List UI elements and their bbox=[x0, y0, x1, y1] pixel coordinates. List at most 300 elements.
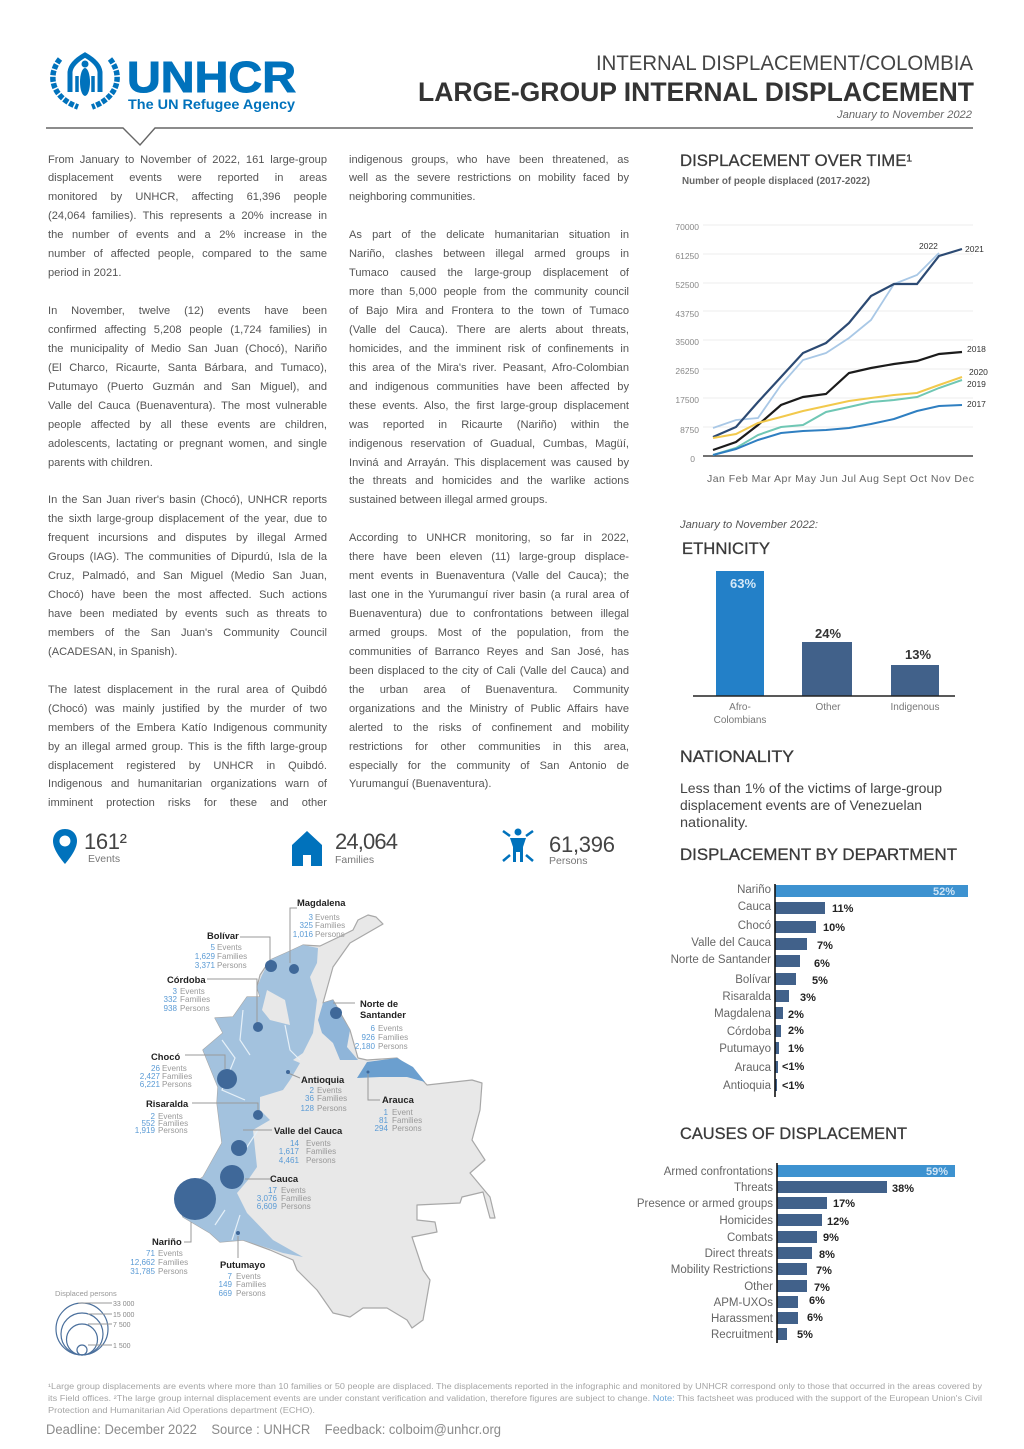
category labels: Antioquia bbox=[723, 1080, 772, 1092]
text column 2: Nariño, clashes between illegal armed groups in bbox=[349, 248, 629, 260]
label: Bolívar: Families bbox=[217, 952, 247, 961]
category labels: Homicides bbox=[719, 1215, 773, 1227]
label: Arauca: 294 bbox=[374, 1124, 388, 1133]
label: Norte de Santander: Norte de bbox=[360, 998, 398, 1009]
legend title: Displaced persons bbox=[55, 1289, 117, 1298]
text column 2: ment events in Buenaventura (Valle del Cauca); the bbox=[349, 570, 629, 582]
value labels: 52% bbox=[933, 886, 955, 898]
label: Magdalena: Events bbox=[315, 913, 340, 922]
label: Valle del Cauca: Persons bbox=[306, 1156, 336, 1165]
label: Cauca: 6,609 bbox=[257, 1202, 277, 1211]
text column 1: In the San Juan river's basin (Chocó), UNHCR reports bbox=[48, 494, 327, 506]
text column 2: this area of the Mira's river. Peasant, Afro-Colombian bbox=[349, 362, 629, 374]
label: Valle del Cauca: 14 bbox=[290, 1139, 299, 1148]
label: Risaralda: Events bbox=[158, 1112, 183, 1121]
text column 2: last one in the Yurumanguí river basin (a rural area of bbox=[349, 589, 629, 601]
text column 2: been displaced to the city of Cali (Valle del Cauca) and bbox=[349, 665, 629, 677]
category labels: Combats bbox=[727, 1232, 773, 1244]
chart heading: displacement over time bbox=[680, 151, 912, 187]
category labels: Presence or armed groups bbox=[637, 1198, 773, 1210]
label: Risaralda: 552 bbox=[141, 1119, 155, 1128]
category labels: Direct threats bbox=[705, 1248, 773, 1260]
label: Bolívar: Persons bbox=[217, 961, 247, 970]
text column 2: indigenous groups, who have been threatened, as bbox=[349, 154, 629, 166]
header rule with notch bbox=[46, 128, 973, 145]
kicker: INTERNAL DISPLACEMENT/COLOMBIA bbox=[596, 52, 973, 75]
text column 1: the number of events and a 2% increase in the bbox=[48, 229, 327, 241]
label: Antioquia bbox=[300, 1074, 347, 1113]
label: Cauca: 3,076 bbox=[257, 1194, 277, 1203]
category labels: Arauca bbox=[735, 1062, 772, 1074]
label: Arauca: Persons bbox=[392, 1124, 422, 1133]
label: Putumayo: Events bbox=[236, 1272, 261, 1281]
bar: Afro-Colombians bbox=[716, 571, 764, 696]
text column 1: frequent incursions and disputes by illegal Armed bbox=[48, 532, 327, 544]
department boundaries bbox=[215, 1010, 300, 1240]
text column 2: these events. Also, the first large-group displacement bbox=[349, 400, 629, 412]
label: Putumayo bbox=[218, 1259, 266, 1298]
category labels: Risaralda bbox=[722, 991, 772, 1003]
label: Chocó bbox=[140, 1051, 192, 1089]
causes heading: CAUSES OF DISPLACEMENT bbox=[680, 1124, 907, 1143]
label: Chocó: 6,221 bbox=[140, 1080, 160, 1089]
text column 1: displacement events were reported in areas bbox=[48, 172, 327, 184]
legend values: 7 500 bbox=[113, 1322, 131, 1329]
category labels: Magdalena bbox=[714, 1008, 772, 1020]
label: Putumayo: Families bbox=[236, 1280, 266, 1289]
text column 1: From January to November of 2022, 161 large-group bbox=[48, 154, 327, 166]
bar: Indigenous bbox=[891, 665, 939, 696]
footnotes: Protection and Humanitarian Aid Operations department (ECHO). bbox=[48, 1406, 315, 1415]
legend values: 33 000 bbox=[113, 1301, 135, 1308]
label: Chocó: 2,427 bbox=[140, 1072, 160, 1081]
text column 2: Tumaco caused the large-group displacement of bbox=[349, 267, 629, 279]
label: Putumayo: 149 bbox=[218, 1280, 232, 1289]
text column 2: restrictions for other communities in this area, bbox=[349, 741, 629, 753]
label: Antioquia: 128 bbox=[300, 1104, 314, 1113]
label: Bolívar: 3,371 bbox=[195, 961, 215, 970]
leader lines bbox=[184, 908, 380, 1258]
label: Valle del Cauca: Events bbox=[306, 1139, 331, 1148]
values: 13% bbox=[905, 647, 931, 662]
category labels: APM-UXOs bbox=[714, 1297, 773, 1309]
label: Chocó: Chocó bbox=[151, 1051, 180, 1062]
label: Antioquia: Families bbox=[317, 1094, 347, 1103]
text column 1: displacement registered by UNHCR in Quibdó. bbox=[48, 760, 327, 772]
label: Risaralda: Persons bbox=[158, 1126, 188, 1135]
categories bbox=[714, 702, 939, 726]
text column 1: members of the San Juan's Community Council bbox=[48, 627, 327, 639]
label: Norte de Santander: Santander bbox=[360, 1009, 406, 1020]
series labels: 2022 bbox=[919, 241, 938, 251]
text column 1: (24,064 families). This represents a 20% increase in bbox=[48, 210, 327, 222]
text column 2 bbox=[349, 154, 629, 790]
label: Chocó: 26 bbox=[151, 1064, 160, 1073]
persons value: 61,396 bbox=[549, 832, 615, 857]
label: Nariño: Families bbox=[158, 1258, 188, 1267]
text column 2: As part of the delicate humanitarian situation in bbox=[349, 229, 629, 241]
text column 1: imminent protection risks for these and other bbox=[48, 797, 327, 809]
text column 1: number of affected people, compared to the same bbox=[48, 248, 327, 260]
region: western affected departments bbox=[175, 945, 318, 1257]
text column 1: people affected by all these events are children, bbox=[48, 419, 327, 431]
text column 2: Buenaventura) due to confrontations between illegal bbox=[349, 608, 629, 620]
text column 2: sustained between illegal armed groups. bbox=[349, 494, 548, 506]
value labels: 3% bbox=[800, 992, 816, 1004]
label: Norte de Santander: 2,180 bbox=[355, 1042, 375, 1051]
label: Córdoba: 332 bbox=[163, 995, 177, 1004]
baseline bbox=[693, 695, 955, 697]
label: Córdoba: Families bbox=[180, 995, 210, 1004]
stat: persons bbox=[503, 828, 615, 867]
text column 1: (ACADESAN, in Spanish). bbox=[48, 646, 177, 658]
label: Cauca: 17 bbox=[268, 1186, 277, 1195]
label: Norte de Santander bbox=[355, 998, 408, 1051]
label: Córdoba bbox=[163, 974, 210, 1013]
series labels: 2019 bbox=[967, 379, 986, 389]
values: 24% bbox=[815, 626, 841, 641]
nationality text: displacement events are of Venezuelan bbox=[680, 797, 922, 813]
series labels: 2021 bbox=[965, 244, 984, 254]
category labels: Valle del Cauca bbox=[691, 937, 772, 949]
text column 1: monitored by UNHCR, affecting 61,396 people bbox=[48, 191, 327, 203]
categories: Afro- bbox=[729, 702, 751, 713]
text column 1: by an illegal armed group. This is the fifth large-group bbox=[48, 741, 327, 753]
text column 1: period in 2021. bbox=[48, 267, 121, 279]
y axis labels: 26250 bbox=[675, 366, 699, 376]
label: Risaralda: 2 bbox=[150, 1112, 155, 1121]
y axis labels: 70000 bbox=[675, 222, 699, 232]
stat: events bbox=[53, 829, 127, 865]
category labels: Mobility Restrictions bbox=[671, 1264, 773, 1276]
text column 2: the urban area of Buenaventura. Community bbox=[349, 684, 629, 696]
label: Antioquia: 36 bbox=[305, 1094, 314, 1103]
value labels: 6% bbox=[814, 958, 830, 970]
category labels: Cauca bbox=[738, 901, 772, 913]
label: Antioquia: Persons bbox=[317, 1104, 347, 1113]
label: Risaralda: Families bbox=[158, 1119, 188, 1128]
y axis labels: 17500 bbox=[675, 395, 699, 405]
value labels bbox=[782, 886, 955, 1092]
bars bbox=[777, 1165, 955, 1340]
text column 1: have been mediated by events such as threats to bbox=[48, 608, 327, 620]
label: Arauca: Event bbox=[392, 1108, 413, 1117]
events label: Events bbox=[88, 853, 120, 865]
bar chart: ethnicity bbox=[693, 571, 955, 726]
text column 2: homicides, and the imminent risk of confinements in bbox=[349, 343, 629, 355]
category labels: Recruitment bbox=[711, 1329, 774, 1341]
text column 1: Groups (IAG). The communities of Dipurdú, Isla de la bbox=[48, 551, 327, 563]
label: Arauca: 81 bbox=[379, 1116, 388, 1125]
families label: Families bbox=[335, 854, 374, 866]
label: Norte de Santander: Events bbox=[378, 1024, 403, 1033]
line: 2017 bbox=[713, 405, 962, 455]
stat: families bbox=[292, 829, 398, 866]
text column 2: Inviná and Arrayán. This displacement was caused by bbox=[349, 456, 629, 468]
bar chart: displacement by department bbox=[671, 884, 968, 1097]
text column 2: the threats and homicides and the warlike actions bbox=[349, 475, 629, 487]
families value: 24,064 bbox=[335, 829, 398, 854]
y axis labels: 0 bbox=[690, 454, 695, 464]
text column 1: Indigenous and humanitarian organizations warn of bbox=[48, 778, 327, 790]
footnotes: its Field offices. ²The large group internal displacement events are under constant verification and validation, therefore figures are subject to change. Note: This factsheet was produced with the support of the European Union's Civil bbox=[48, 1394, 982, 1403]
value labels: 10% bbox=[823, 922, 845, 934]
axis bbox=[776, 1163, 778, 1343]
y axis labels: 35000 bbox=[675, 337, 699, 347]
y axis labels: 8750 bbox=[680, 425, 699, 435]
text column 2: more than 5,000 people from the community council bbox=[349, 286, 629, 298]
line chart bbox=[675, 222, 988, 485]
value labels: 7% bbox=[814, 1282, 830, 1294]
category labels bbox=[671, 884, 772, 1092]
line: 2019 bbox=[713, 380, 962, 455]
label: Valle del Cauca: 1,617 bbox=[279, 1147, 299, 1156]
value labels: <1% bbox=[782, 1061, 805, 1073]
line: 2022 bbox=[713, 253, 939, 428]
label: Putumayo: 7 bbox=[227, 1272, 232, 1281]
label: Nariño: Events bbox=[158, 1249, 183, 1258]
map legend: displaced persons bbox=[55, 1289, 135, 1355]
text column 2: communities of Barranco Reyes and San José, has bbox=[349, 646, 629, 658]
label: Norte de Santander: 6 bbox=[370, 1024, 375, 1033]
text column 2: alerted to the risks of confinement and mobility bbox=[349, 722, 629, 734]
map of Colombia bbox=[130, 897, 495, 1328]
label: Risaralda bbox=[135, 1098, 189, 1135]
y axis labels: 52500 bbox=[675, 280, 699, 290]
category labels: Other bbox=[744, 1281, 773, 1293]
label: Norte de Santander: Families bbox=[378, 1033, 408, 1042]
value labels: 8% bbox=[819, 1249, 835, 1261]
category labels: Córdoba bbox=[727, 1026, 772, 1038]
value labels: 5% bbox=[797, 1329, 813, 1341]
events value: 161² bbox=[84, 829, 127, 854]
bars bbox=[775, 885, 968, 1091]
y axis labels bbox=[675, 222, 699, 464]
main title: LARGE-GROUP INTERNAL DISPLACEMENT bbox=[418, 77, 974, 107]
footnotes: ¹Large group displacements are events where more than 10 families or 50 people are displaced. The displacements reported in the infographic and monitored by UNHCR correspond only to those that occurred in the areas covered by bbox=[48, 1382, 982, 1391]
persons label: Persons bbox=[549, 855, 588, 867]
label: Antioquia: Antioquia bbox=[301, 1074, 345, 1085]
label: Córdoba: Córdoba bbox=[167, 974, 206, 985]
legend values bbox=[113, 1301, 135, 1350]
text column 2: of Bajo Mira and Frontera to the town of Tumaco bbox=[349, 305, 629, 317]
category labels: Chocó bbox=[738, 920, 771, 932]
value labels: 5% bbox=[812, 975, 828, 987]
text column 1: parents with children. bbox=[48, 456, 153, 468]
ethnicity heading: ETHNICITY bbox=[682, 539, 770, 558]
label: Antioquia: 2 bbox=[309, 1086, 314, 1095]
legend circles bbox=[56, 1303, 108, 1355]
date range: January to November 2022 bbox=[836, 109, 972, 121]
label: Cauca: Cauca bbox=[270, 1173, 299, 1184]
value labels: 6% bbox=[807, 1312, 823, 1324]
sub-heading: Number of people displaced (2017-2022) bbox=[682, 176, 870, 187]
month labels: Jan Feb Mar Apr May Jun Jul Aug Sept Oct Nov Dec bbox=[707, 473, 974, 485]
label: Córdoba: 3 bbox=[172, 987, 177, 996]
label: Nariño bbox=[130, 1236, 188, 1276]
period note: January to November 2022: bbox=[679, 519, 818, 531]
gridlines bbox=[703, 225, 973, 427]
label: Arauca: Families bbox=[392, 1116, 422, 1125]
text column 2: and indigenous communities have been affected by bbox=[349, 381, 629, 393]
legend leaders bbox=[78, 1303, 112, 1345]
label: Arauca bbox=[374, 1094, 422, 1133]
label: Nariño: 31,785 bbox=[130, 1267, 155, 1276]
text column 1: In November, twelve (12) events have been bbox=[48, 305, 327, 317]
nationality text: nationality. bbox=[680, 814, 748, 830]
value labels bbox=[797, 1166, 948, 1341]
label: Chocó: Persons bbox=[162, 1080, 192, 1089]
value labels: 38% bbox=[892, 1183, 914, 1195]
value labels: 6% bbox=[809, 1295, 825, 1307]
label: Valle del Cauca: 4,461 bbox=[279, 1156, 299, 1165]
y axis labels: 43750 bbox=[675, 309, 699, 319]
text column 2: (Valle del Cauca). There are alerts about threats, bbox=[349, 324, 629, 336]
category labels: Putumayo bbox=[719, 1043, 771, 1055]
category labels: Norte de Santander bbox=[671, 954, 771, 966]
series labels: 2018 bbox=[967, 344, 986, 354]
text column 2: According to UNHCR monitoring, so far in 2022, bbox=[349, 532, 629, 544]
line: 2020 bbox=[713, 377, 962, 438]
label: Córdoba: Persons bbox=[180, 1004, 210, 1013]
value labels: 12% bbox=[827, 1216, 849, 1228]
legend values: 15 000 bbox=[113, 1312, 135, 1319]
label: Putumayo: Persons bbox=[236, 1289, 266, 1298]
nationality heading: NATIONALITY bbox=[680, 747, 794, 766]
label: Cauca: Persons bbox=[281, 1202, 311, 1211]
label: Valle del Cauca: Families bbox=[306, 1147, 336, 1156]
country outline bbox=[175, 915, 495, 1328]
text column 1: Putumayo (Puerto Guzmán and San Miguel), and bbox=[48, 381, 327, 393]
value labels: 11% bbox=[832, 903, 854, 915]
bar: Other bbox=[802, 642, 852, 696]
label: Valle del Cauca: Valle del Cauca bbox=[274, 1125, 343, 1136]
region: Norte de Santander bbox=[318, 1000, 358, 1060]
region: Arauca bbox=[357, 1058, 425, 1082]
value labels: 17% bbox=[833, 1198, 855, 1210]
value labels: 2% bbox=[788, 1009, 804, 1021]
value labels: 59% bbox=[926, 1166, 948, 1178]
text column 2: indigenous reservation of Guadual, Cumbas, Magüí, bbox=[349, 438, 629, 450]
value labels: 9% bbox=[823, 1232, 839, 1244]
label: Norte de Santander: Persons bbox=[378, 1042, 408, 1051]
category labels: Nariño bbox=[737, 884, 771, 896]
label: Córdoba: 938 bbox=[163, 1004, 177, 1013]
text column 1: Valle del Cauca (Buenaventura). The most vulnerable bbox=[48, 400, 327, 412]
text column 2: was reported in Ricaurte (Nariño) within the bbox=[349, 419, 629, 431]
categories: Other bbox=[815, 702, 841, 713]
icon: person with rays bbox=[503, 828, 533, 862]
text column 1: The latest displacement in the rural area of Quibdó bbox=[48, 684, 327, 696]
values: 63% bbox=[730, 576, 756, 591]
UNHCR logo bbox=[53, 53, 296, 112]
category labels: Bolívar bbox=[735, 974, 771, 986]
label: Nariño: Persons bbox=[158, 1267, 188, 1276]
label: Nariño: 12,662 bbox=[130, 1258, 155, 1267]
label: Nariño: Nariño bbox=[152, 1236, 182, 1247]
label: Bolívar: Events bbox=[217, 943, 242, 952]
text column 1: members of the Embera Katío Indigenous community bbox=[48, 722, 327, 734]
series labels: 2017 bbox=[967, 399, 986, 409]
categories: Colombians bbox=[714, 715, 766, 726]
text column 1: (El Charco, Ricaurte, Santa Bárbara, and Tumaco), bbox=[48, 362, 327, 374]
text column 2: neighboring communities. bbox=[349, 191, 475, 203]
label: Cauca: Events bbox=[281, 1186, 306, 1195]
series labels: 2020 bbox=[969, 367, 988, 377]
label: Nariño: 71 bbox=[146, 1249, 155, 1258]
label: Risaralda: 1,919 bbox=[135, 1126, 155, 1135]
icon: house bbox=[292, 831, 322, 866]
text column 1: the municipality of Medio San Juan (Chocó), Nariño bbox=[48, 343, 327, 355]
icon: map pin bbox=[53, 829, 77, 864]
label: Magdalena: 325 bbox=[299, 921, 313, 930]
text column 2: Yurumanguí (Buenaventura). bbox=[349, 778, 491, 790]
label: Norte de Santander: 926 bbox=[361, 1033, 375, 1042]
line: 2021 bbox=[713, 249, 962, 437]
label: Bolívar: Bolívar bbox=[207, 930, 239, 941]
text column 1: adolescents, lactating or pregnant women, and single bbox=[48, 438, 327, 450]
line: 2018 bbox=[713, 352, 962, 450]
text column 2: there have been eleven (11) large-group displace- bbox=[349, 551, 629, 563]
footnotes bbox=[48, 1382, 982, 1415]
y axis labels: 61250 bbox=[675, 251, 699, 261]
category labels: Threats bbox=[734, 1182, 773, 1194]
label: Magdalena: Magdalena bbox=[297, 897, 346, 908]
text column 1: (Chocó) was mainly justified by the murder of two bbox=[48, 703, 327, 715]
value labels: 1% bbox=[788, 1043, 804, 1055]
heading: DISPLACEMENT OVER TIME¹ bbox=[680, 151, 912, 170]
label: Magdalena bbox=[293, 897, 346, 939]
logo tagline: The UN Refugee Agency bbox=[128, 96, 295, 112]
label: Putumayo: 669 bbox=[218, 1289, 232, 1298]
label: Bolívar: 5 bbox=[210, 943, 215, 952]
value labels: 7% bbox=[816, 1265, 832, 1277]
label: Chocó: Families bbox=[162, 1072, 192, 1081]
category labels bbox=[637, 1166, 774, 1341]
categories: Indigenous bbox=[891, 702, 939, 713]
label: Arauca: 1 bbox=[383, 1108, 388, 1117]
label: Magdalena: 3 bbox=[308, 913, 313, 922]
value labels: <1% bbox=[782, 1080, 805, 1092]
text column 1 bbox=[48, 154, 328, 809]
label: Cauca bbox=[257, 1173, 311, 1211]
text column 1: confirmed affecting 5,208 people (1,724 families) in bbox=[48, 324, 327, 336]
label: Cauca: Families bbox=[281, 1194, 311, 1203]
legend values: 1 500 bbox=[113, 1343, 131, 1350]
label: Bolívar bbox=[195, 930, 247, 970]
axis bbox=[774, 884, 776, 1097]
value labels: 7% bbox=[817, 940, 833, 952]
text column 2: armed groups. Most of the population, from the bbox=[349, 627, 629, 639]
label: Magdalena: Families bbox=[315, 921, 345, 930]
text column 2: especially for the community of San Antonio de bbox=[349, 760, 629, 772]
values bbox=[730, 576, 931, 662]
displacement circles bbox=[174, 960, 370, 1235]
department heading: DISPLACEMENT BY DEPARTMENT bbox=[680, 845, 957, 864]
text column 1: Chocó) have been the most affected. Such actions bbox=[48, 589, 327, 601]
text column 1: the sixth large-group displacement of the year, due to bbox=[48, 513, 327, 525]
label: Magdalena: 1,016 bbox=[293, 930, 313, 939]
header title block bbox=[418, 52, 974, 121]
text column 1: Cruz, Palmadó, and San Miguel (Medio San Juan, bbox=[48, 570, 327, 582]
label: Antioquia: Events bbox=[317, 1086, 342, 1095]
label: Risaralda: Risaralda bbox=[146, 1098, 189, 1109]
region: gray gap in the north bbox=[262, 990, 290, 1025]
logo wordmark: UNHCR bbox=[127, 53, 296, 102]
category labels: Harassment bbox=[711, 1313, 774, 1325]
nationality text bbox=[680, 780, 942, 830]
value labels: 2% bbox=[788, 1025, 804, 1037]
